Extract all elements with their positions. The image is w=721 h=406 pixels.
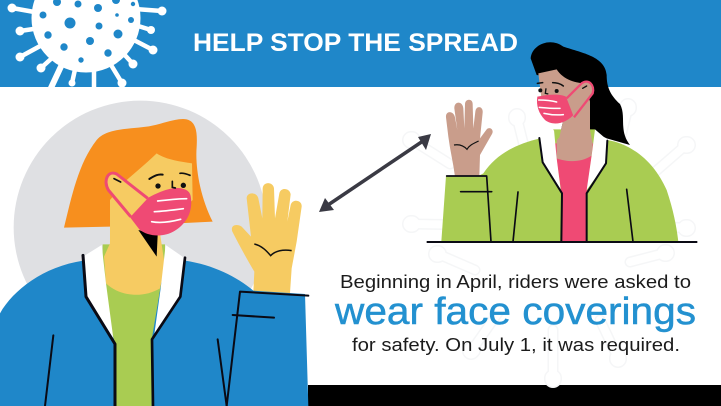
neck and face [538, 69, 593, 161]
hair [64, 119, 213, 228]
icon: virus in header [8, 0, 166, 90]
raised hand [232, 183, 302, 293]
highlighted phrase: wear face coverings [334, 291, 696, 333]
eyes and brows [537, 83, 563, 94]
jacket lines [45, 255, 308, 406]
white lapels [84, 245, 113, 338]
jacket [0, 261, 308, 406]
neck and face [104, 153, 193, 295]
hair [531, 42, 630, 145]
body copy [334, 272, 696, 355]
white lapels [540, 130, 561, 189]
line one: Beginning in April, riders were asked to [340, 272, 691, 292]
eyes and brows [149, 173, 190, 189]
grey circle backdrop [14, 101, 267, 354]
jacket [441, 138, 678, 242]
green shirt neck [103, 244, 165, 406]
person on the left [0, 101, 308, 406]
line three: for safety. On July 1, it was required. [352, 335, 680, 355]
header band [0, 0, 721, 87]
pink shirt [553, 130, 595, 242]
ground line [427, 239, 697, 245]
jacket lines [447, 138, 633, 242]
person on the right [427, 42, 697, 242]
neck shadow [138, 230, 158, 257]
faint background virus [411, 107, 687, 379]
raised hand [446, 100, 493, 177]
face mask [537, 82, 593, 123]
title: HELP STOP THE SPREAD [193, 29, 518, 57]
double-headed arrow [319, 134, 431, 212]
green neck slivers [553, 129, 595, 143]
footer band [308, 385, 721, 406]
face mask [106, 173, 191, 235]
